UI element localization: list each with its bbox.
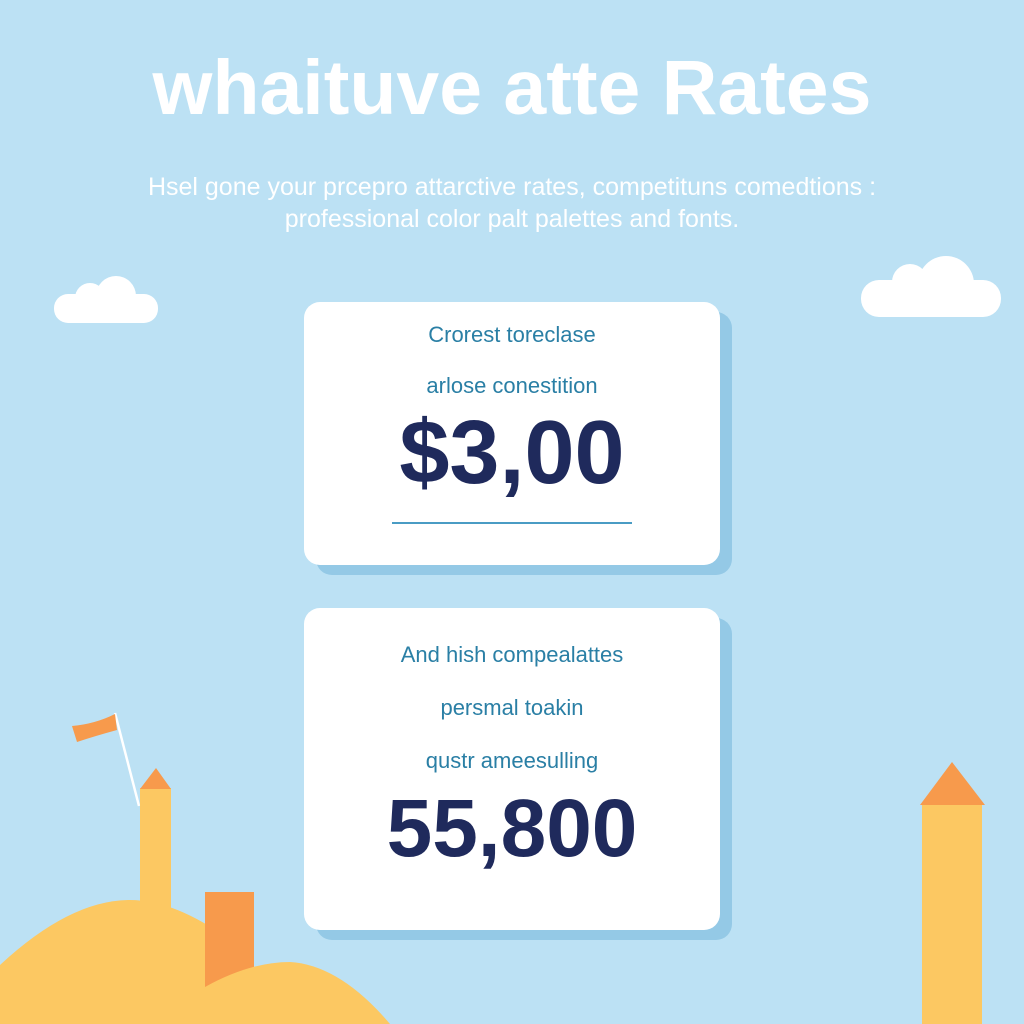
card 2 label line 2: persmal toakin bbox=[440, 695, 584, 720]
card 1 underline bbox=[392, 522, 632, 524]
illustration: castle hill bbox=[0, 712, 390, 1024]
subtitle bbox=[148, 173, 876, 233]
card 2 number: 55,800 bbox=[387, 783, 637, 874]
panel: card 1 bbox=[304, 302, 720, 565]
card 2 label line 1: And hish compealattes bbox=[401, 642, 623, 667]
icon: right cloud bbox=[861, 256, 1001, 317]
illustration: right tower bbox=[920, 762, 985, 1024]
card 1 number: $3,00 bbox=[399, 403, 625, 503]
subtitle: professional color palt palettes and fonts. bbox=[285, 205, 739, 233]
title: whaituve atte Rates bbox=[153, 45, 871, 131]
panel: card 2 bbox=[304, 608, 720, 930]
card 2 label line 3: qustr ameesulling bbox=[426, 748, 598, 773]
card 1 label line 2: arlose conestition bbox=[426, 373, 598, 398]
subtitle: Hsel gone your prcepro attarctive rates, competituns comedtions : bbox=[148, 173, 876, 201]
icon: left cloud bbox=[54, 276, 158, 323]
card 1 label line 1: Crorest toreclase bbox=[428, 322, 596, 347]
